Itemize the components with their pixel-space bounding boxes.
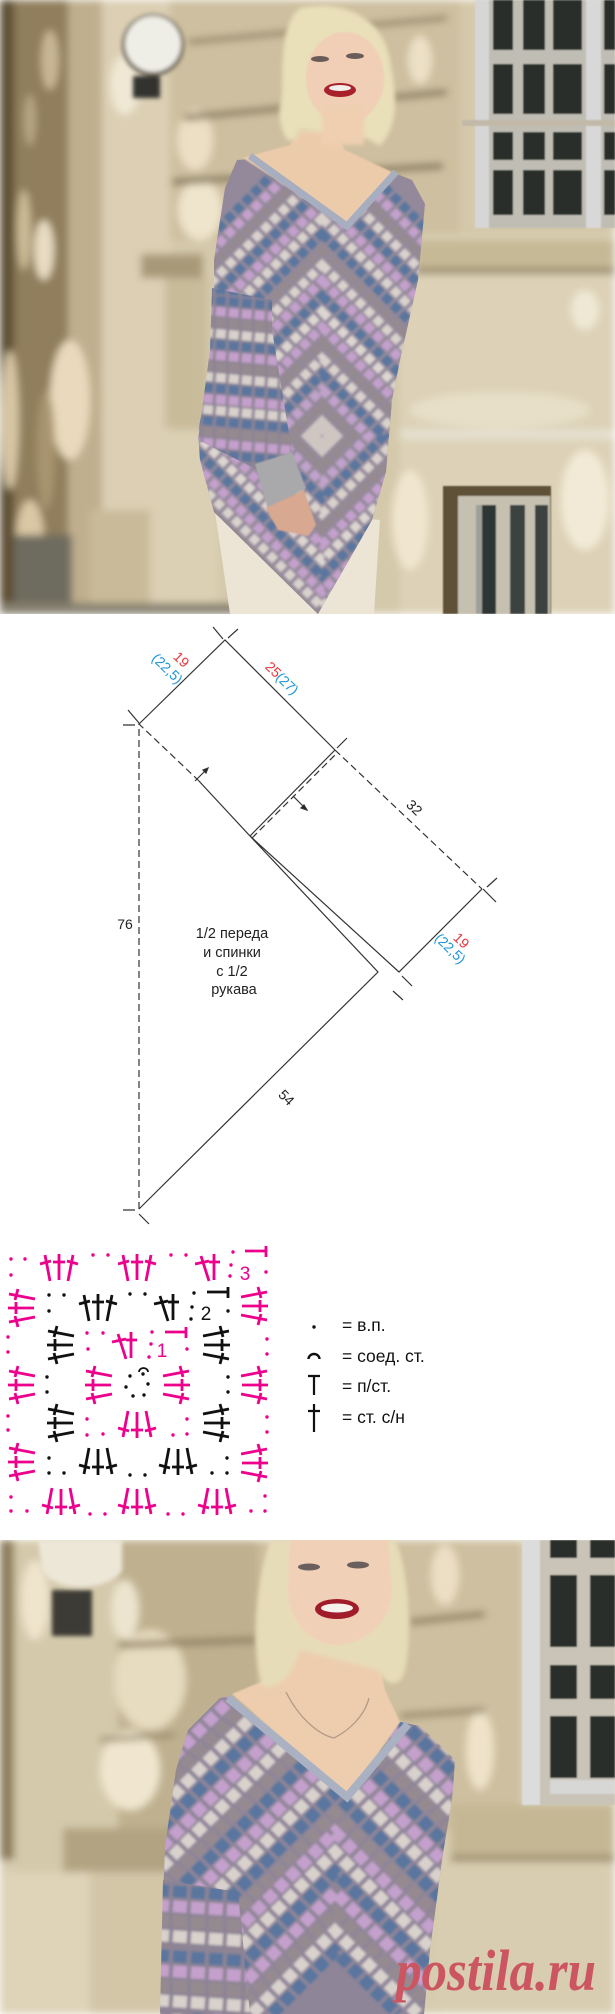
photo: wall lamp [122,14,184,98]
photo: face [306,32,384,145]
photo: barred upper window [462,0,615,228]
legend labels: = ст. с/н [342,1407,405,1427]
panel: schematic pattern diagram [123,627,497,1224]
chart round 1 pink clusters [85,1327,190,1438]
diagram measurement labels: 25 [262,658,285,681]
diagram measurement labels [117,648,473,1109]
legend labels: = п/ст. [342,1376,391,1396]
legend labels: = в.п. [342,1315,386,1335]
legend labels: = соед. ст. [342,1346,425,1366]
photo: chest skin [243,130,392,226]
legend labels [342,1315,425,1427]
photo: close-up of model [0,1540,615,2014]
close-up neckline band [228,1698,408,1797]
legend: crochet symbols [308,1315,425,1432]
legend symbol: slip stitch [308,1354,320,1359]
diagram center label: и спинки [203,945,261,961]
diagram arrow left [195,768,208,781]
close-up window [522,1540,615,1805]
photo: left sleeve bands [198,288,292,467]
diagram measurement labels: (22,5) [432,930,469,967]
diagram tick marks [123,627,497,1224]
diagram measurement labels: 54 [275,1086,298,1109]
diagram center label: с 1/2 [216,964,248,980]
diagram measurement labels: 32 [403,796,426,819]
photo background: building wall [0,0,615,614]
diagram measurement labels: 19 [450,929,473,952]
chart round numbers: 3 [240,1264,250,1285]
legend symbol: half double crochet [308,1376,320,1395]
chart round 3 pink clusters [8,1246,268,1515]
chart round 2 black clusters [47,1287,230,1475]
close-up hair [256,1540,409,1687]
diagram measurement labels: 19 [170,648,193,671]
photo: model in crochet tunic outdoors [0,0,615,614]
diagram center label: рукава [211,982,258,998]
diagram center label: 1/2 переда [196,926,269,942]
photo: crochet tunic [198,159,425,614]
diagram measurement labels: (27) [273,669,302,698]
chart: granny square crochet chart: 2 [201,1304,211,1325]
close-up background wall [0,1540,615,2014]
close-up sleeve bands [160,1880,250,2014]
photo: tunic neckline band [250,156,396,226]
close-up chest skin [232,1640,400,1795]
photo: lower basement window [443,486,551,614]
chart: granny square crochet chart: 1 [157,1341,167,1362]
diagram outline solid [139,640,482,1209]
diagram arrow right [293,796,307,810]
diagram measurement labels: (22,5) [149,650,186,687]
close-up lamp [38,1540,122,1636]
close-up face [288,1540,392,1645]
close-up necklace [286,1692,369,1738]
diagram measurement labels: 76 [117,916,133,932]
legend symbol: double crochet [308,1404,320,1432]
diagram outline dashed [139,724,482,1209]
legend symbol: chain stitch [312,1325,316,1329]
photo: grey undersleeve cuff [255,452,306,510]
close-up tunic [160,1696,455,2014]
photo: hand with ring [266,490,316,536]
chart black chain dots [45,1291,230,1477]
chart: granny square crochet chart [6,1246,269,1516]
photo: white trousers [214,505,380,614]
chart pink chain dots [6,1250,269,1516]
photo: blonde hair [279,6,395,146]
